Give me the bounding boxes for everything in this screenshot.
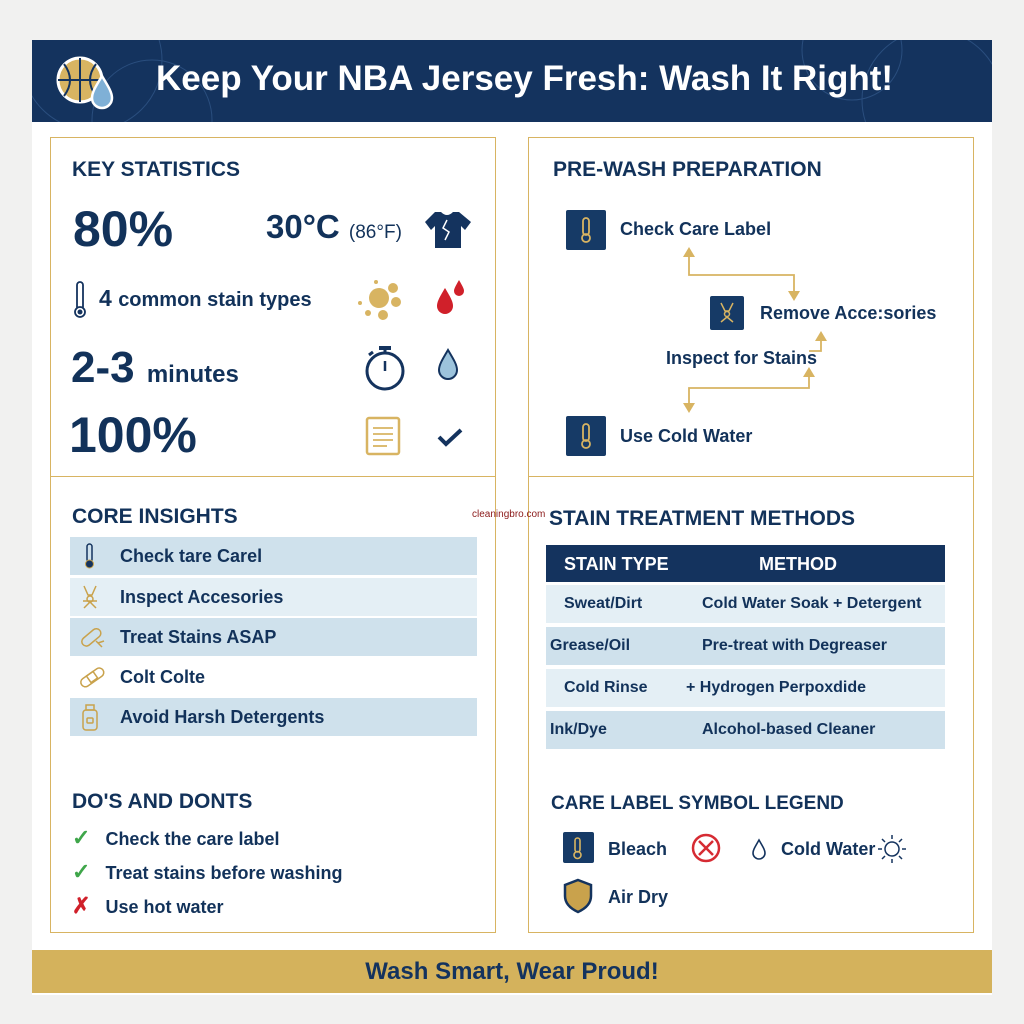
dont 1: ✗ Use hot water [72, 893, 223, 918]
insight rows [70, 537, 477, 736]
title: Keep Your NBA Jersey Fresh: Wash It Right! [156, 59, 893, 98]
icon: scroll [366, 416, 400, 456]
footer banner [32, 950, 992, 993]
table header [546, 545, 945, 582]
row 5: Avoid Harsh Detergents [120, 707, 324, 727]
row cold rinse: + Hydrogen Perpoxdide [686, 679, 866, 696]
row cold rinse: Cold Rinse [564, 679, 648, 696]
row 2 [70, 578, 477, 616]
step: inspect for stains: Inspect for Stains [666, 348, 817, 368]
heading: CORE INSIGHTS [72, 505, 238, 528]
heading: PRE-WASH PREPARATION [553, 158, 822, 181]
row 2: Inspect Accesories [120, 587, 283, 607]
stat 30C: 30°C (86°F) [266, 208, 402, 245]
table header: METHOD [759, 554, 837, 574]
panel: pre-wash preparation [528, 137, 974, 478]
legend cold water: Cold Water [781, 839, 875, 859]
row grease: Pre-treat with Degreaser [702, 637, 887, 654]
icon: water drop [438, 348, 458, 380]
header banner [32, 40, 992, 122]
panel: key statistics [50, 137, 496, 478]
row grease [546, 627, 945, 665]
icon: jersey [425, 212, 471, 248]
row sweat [546, 585, 945, 623]
legend items [563, 832, 906, 914]
footer banner: Wash Smart, Wear Proud! [365, 958, 659, 985]
table: stain treatment [546, 545, 945, 749]
row ink: Alcohol-based Cleaner [702, 721, 875, 738]
legend air dry [564, 878, 668, 914]
do 1: ✓ Check the care label [72, 825, 280, 850]
icon: check [438, 428, 462, 447]
icon: basketball and drop [56, 56, 114, 110]
panel: stain treatment and legend [528, 476, 974, 933]
row sweat: Cold Water Soak + Detergent [702, 595, 921, 612]
row cold rinse [546, 669, 945, 707]
panel: core insights and dos [50, 476, 496, 933]
watermark: cleaningbro.com [472, 509, 545, 520]
do 2: ✓ Treat stains before washing [72, 859, 343, 884]
icon: stains [358, 280, 401, 320]
row 5 [70, 698, 477, 736]
row grease: Grease/Oil [550, 637, 630, 654]
icon: no symbol [692, 834, 720, 862]
row 3: Treat Stains ASAP [120, 627, 276, 647]
stat 2-3 minutes: 2-3 minutes [71, 343, 239, 392]
step: remove accessories: Remove Acce:sories [760, 303, 936, 323]
arrows [683, 247, 827, 413]
icon: sun [878, 835, 906, 863]
legend bleach [563, 832, 667, 863]
icon: thermometer [74, 281, 86, 318]
row ink: Ink/Dye [550, 721, 607, 738]
heading: dos and donts: DO'S AND DONTS [72, 790, 252, 813]
row 4 [70, 658, 477, 696]
table header: STAIN TYPE [564, 554, 669, 574]
row sweat: Sweat/Dirt [564, 595, 642, 612]
stat 80%: 80% [73, 201, 173, 257]
heading: STAIN TREATMENT METHODS [549, 507, 855, 530]
legend bleach: Bleach [608, 839, 667, 859]
icon: stopwatch [366, 346, 404, 390]
dos list [72, 825, 343, 918]
row 4: Colt Colte [120, 667, 205, 687]
step: remove accessories [710, 296, 936, 330]
stat stain types: 4 common stain types [99, 285, 312, 311]
step: check care label: Check Care Label [620, 219, 771, 239]
step: check care label [566, 210, 771, 250]
legend air dry: Air Dry [608, 887, 668, 907]
heading: KEY STATISTICS [72, 158, 240, 181]
row 3 [70, 618, 477, 656]
step: use cold water [566, 416, 752, 456]
icon: blood drops [437, 280, 464, 314]
row ink [546, 711, 945, 749]
stat 100%: 100% [69, 407, 197, 463]
row 1: Check tare Carel [120, 546, 262, 566]
heading: legend: CARE LABEL SYMBOL LEGEND [551, 793, 844, 814]
row 1 [70, 537, 477, 575]
step: use cold water: Use Cold Water [620, 426, 752, 446]
